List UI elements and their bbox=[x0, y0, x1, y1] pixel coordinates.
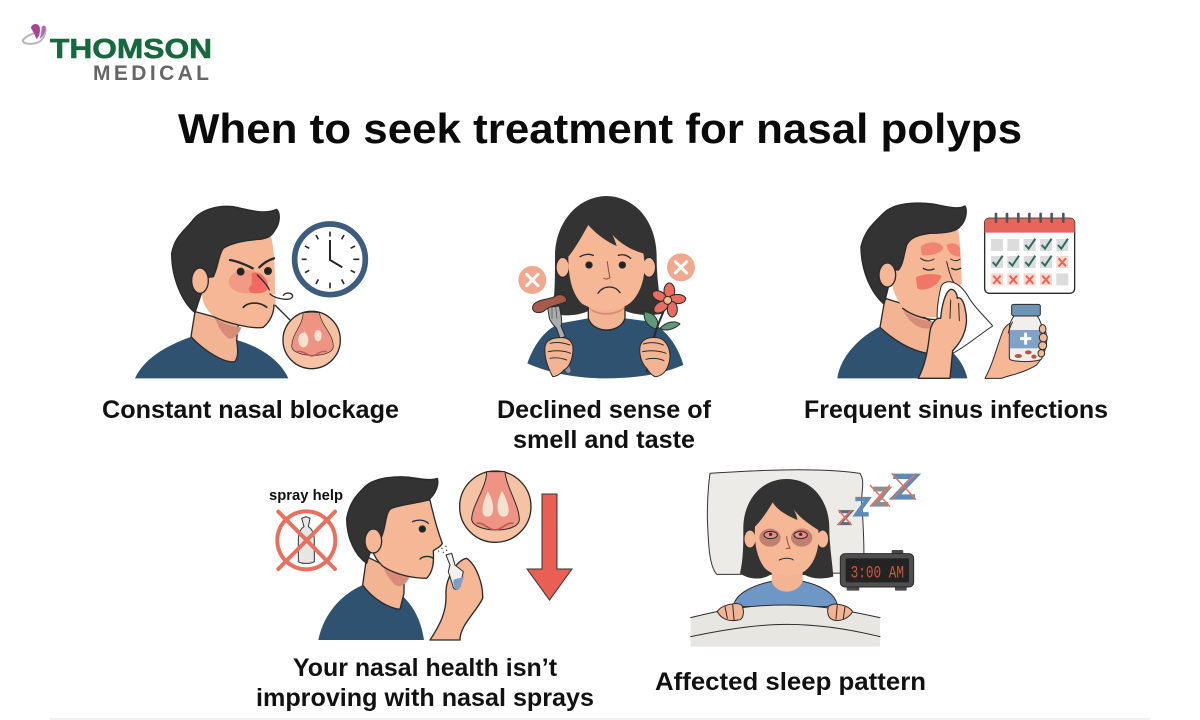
panel: nasal health not improving bbox=[256, 471, 594, 712]
panel: affected sleep pattern bbox=[655, 470, 926, 696]
label: Your nasal health isn’t bbox=[293, 654, 558, 682]
icon: nasal inset bbox=[460, 471, 531, 542]
icon: butterfly heart bbox=[23, 25, 45, 44]
logo subline: MEDICAL bbox=[93, 62, 209, 85]
illustration: tired woman in bed bbox=[733, 479, 837, 607]
label: Affected sleep pattern bbox=[655, 668, 926, 696]
icon: digital alarm clock: 3:00 AM bbox=[851, 564, 904, 583]
panel: constant nasal blockage bbox=[102, 206, 399, 424]
label bbox=[256, 654, 594, 712]
icon: fork with sausage bbox=[533, 295, 573, 377]
arrow: down bbox=[527, 494, 572, 600]
label: smell and taste bbox=[513, 426, 695, 454]
label: improving with nasal sprays bbox=[256, 684, 594, 712]
icon: crossed z letters bbox=[838, 473, 916, 525]
icon: medicine bottle in hand bbox=[985, 304, 1047, 378]
icon: nasal polyp inset bbox=[275, 305, 340, 369]
illustration: blanket and hands bbox=[691, 604, 880, 647]
title: When to seek treatment for nasal polyps bbox=[178, 105, 1022, 152]
label: Frequent sinus infections bbox=[804, 396, 1108, 424]
label: Declined sense of bbox=[497, 396, 712, 424]
spray help caption: spray help bbox=[269, 488, 343, 504]
illustration: man using nasal spray bbox=[318, 477, 483, 640]
icon: flower bbox=[640, 283, 686, 377]
illustration: man blowing nose bbox=[837, 203, 993, 378]
icon: calendar bbox=[985, 214, 1075, 293]
illustration: man with blocked nose bbox=[135, 206, 293, 378]
icon: wall clock bbox=[295, 224, 365, 295]
logo wordmark: THOMSON bbox=[50, 33, 212, 64]
panel: declined sense of smell and taste bbox=[497, 196, 712, 454]
icon: pillow bbox=[707, 470, 864, 574]
label bbox=[497, 396, 712, 454]
logo bbox=[23, 25, 212, 85]
panel: frequent sinus infections bbox=[804, 203, 1108, 424]
icon: digital alarm clock bbox=[840, 550, 914, 591]
icon: crossed-out spray bottle bbox=[277, 511, 335, 569]
illustration: woman with food and flower bbox=[527, 196, 683, 378]
icon: crossed-out marks bbox=[518, 253, 695, 294]
label: Constant nasal blockage bbox=[102, 396, 399, 424]
